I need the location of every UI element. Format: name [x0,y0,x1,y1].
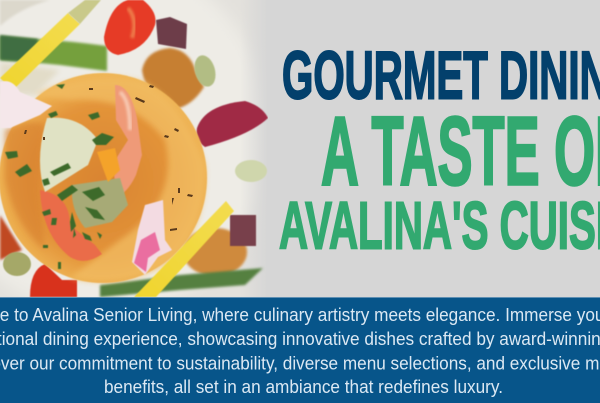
green bean top [194,54,216,88]
green bean right [235,160,267,182]
description text: benefits, all set in an ambiance that redefines luxury. [104,377,503,397]
pepper specks [24,85,193,231]
yellow vegetable stick bottom [134,201,234,297]
description text [0,305,600,397]
beet cube top [156,17,187,49]
yellow vegetable stick top [0,13,80,90]
red beet wedge [197,101,268,147]
asparagus top [0,36,107,71]
shrimp lower [40,190,102,261]
shrimp upper [112,85,142,196]
flower petal bottom [132,200,172,275]
beet cube bottom [230,215,256,246]
food photo: plated gourmet dish [0,0,270,315]
polenta disc [0,73,207,283]
edible orange petal [97,148,120,182]
asparagus bottom [100,268,263,297]
bottom right sauce [183,228,247,276]
flower petal top left [0,81,52,128]
tomato top [104,0,156,55]
fish fillet [40,118,98,192]
description band [0,297,600,403]
sauce blob top [142,48,204,109]
green bean bottom left [3,252,31,276]
herb garnish [5,84,114,269]
tomato bottom left [30,264,77,297]
